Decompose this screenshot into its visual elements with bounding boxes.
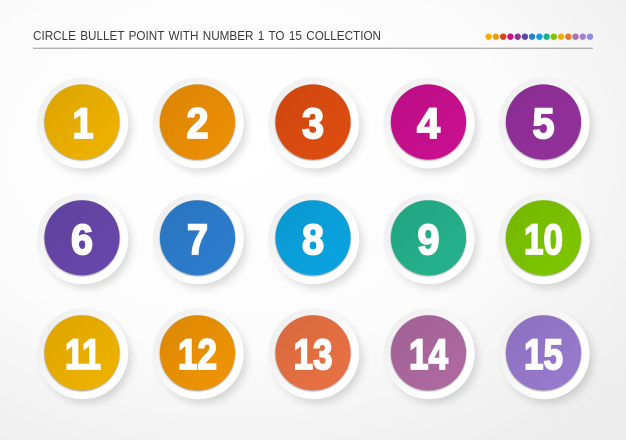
badge 12 — [153, 308, 246, 403]
badge 2 — [153, 78, 246, 172]
badge 8 — [268, 193, 362, 288]
badge 6 — [37, 193, 131, 288]
badge 9: 9 — [418, 216, 440, 264]
badge 15 — [499, 308, 592, 403]
badge 3: 3 — [302, 100, 324, 148]
badge 10 — [499, 193, 592, 288]
badge 6: 6 — [71, 216, 93, 264]
badge 2: 2 — [186, 100, 208, 148]
badge 15: 15 — [524, 331, 563, 379]
badge 5: 5 — [532, 100, 554, 148]
badge 13: 13 — [294, 331, 332, 379]
badge 3 — [268, 78, 362, 172]
title: CIRCLE BULLET POINT WITH NUMBER 1 TO 15 COLLECTION — [33, 29, 381, 43]
badge 1 — [37, 78, 131, 172]
badge 4: 4 — [417, 100, 440, 148]
badge 1: 1 — [72, 100, 94, 148]
badge 7 — [153, 193, 246, 288]
badge 13 — [268, 308, 362, 403]
badge 5 — [499, 78, 592, 172]
badge 8: 8 — [302, 216, 324, 264]
badge 12: 12 — [178, 331, 217, 379]
badge 11: 11 — [65, 331, 101, 379]
badge 4 — [384, 78, 478, 172]
badge 9 — [384, 193, 478, 288]
badge 14: 14 — [409, 331, 448, 379]
legend: colour dots — [486, 34, 593, 40]
badge 14 — [384, 308, 478, 403]
badge 7: 7 — [187, 216, 208, 264]
badge 10: 10 — [524, 216, 563, 264]
badge 11 — [37, 308, 131, 403]
